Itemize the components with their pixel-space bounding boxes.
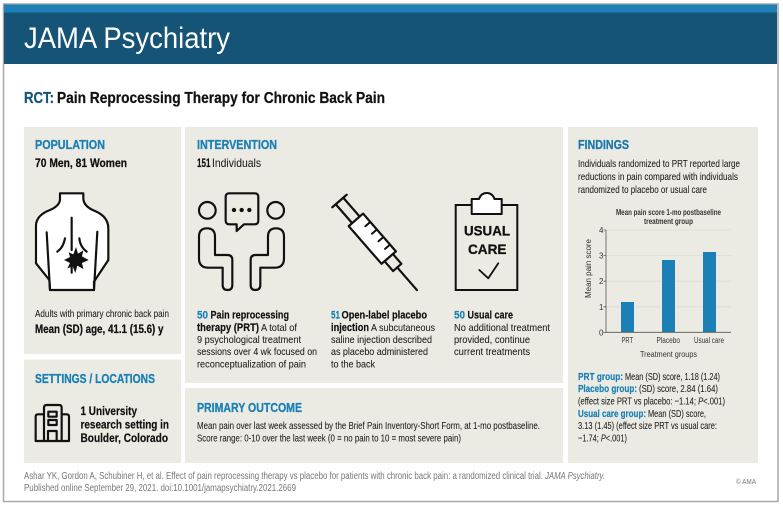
y axis tick labels: 4: [599, 226, 604, 235]
group results: (effect size PRT vs placebo: −1.14; P<.001): [578, 396, 725, 408]
text: usual care arm: current treatments: [454, 346, 530, 358]
x axis category labels: Placebo: [656, 336, 680, 345]
group results: [578, 371, 725, 444]
x axis category labels: Usual care: [694, 336, 724, 345]
text: pain reprocessing therapy arm: [197, 310, 317, 370]
group results: (SD) score, 2.84 (1.64): [639, 383, 718, 395]
x axis category labels: [622, 336, 724, 345]
x axis category labels: PRT: [622, 336, 633, 345]
title: RCT:: [24, 90, 54, 107]
setting description: [80, 404, 169, 445]
text: pain reprocessing therapy arm: reconceptualization of pain: [197, 358, 306, 370]
citation: Ashar YK, Gordon A, Schubiner H, et al. Effect of pain reprocessing therapy vs placebo for patients with chronic back pain: a randomized clinical trial.: [24, 471, 543, 482]
text: placebo injection arm: to the back: [331, 358, 376, 370]
icon: therapy conversation: [199, 193, 284, 290]
participant counts: 70 Men, 81 Women: [35, 156, 127, 170]
y axis tick labels: 0: [599, 328, 604, 337]
setting description: research setting in: [80, 418, 169, 432]
text: pain reprocessing therapy arm: sessions over 4 wk focused on: [197, 346, 317, 358]
heading: findings: FINDINGS: [578, 138, 629, 152]
icon: syringe: [332, 195, 424, 296]
heading: population: POPULATION: [35, 138, 105, 152]
bar: usual care: [703, 252, 716, 332]
population description: Adults with primary chronic back pain: [35, 308, 169, 320]
header banner: [4, 4, 777, 64]
text: placebo injection arm: as placebo administered: [331, 346, 428, 358]
text: usual care arm: No additional treatment: [454, 322, 550, 334]
panel: population: [24, 127, 181, 354]
icon: usual care clipboard: [456, 193, 517, 290]
citation: [24, 471, 605, 494]
text: placebo injection arm: saline injection described: [331, 334, 432, 346]
journal name: JAMA Psychiatry: [24, 22, 230, 55]
outcome description: Mean pain over last week assessed by the Brief Pain Inventory-Short Form, at 1-mo postbaseline.: [197, 421, 540, 432]
bar: PRT: [621, 302, 634, 332]
group results: Usual care group:: [578, 408, 646, 420]
y axis tick labels: 3: [599, 252, 604, 261]
findings summary: randomized to placebo or usual care: [578, 184, 707, 196]
group results: 3.13 (1.45) (effect size PRT vs usual care:: [578, 420, 717, 432]
text: placebo injection arm: injection: [331, 322, 369, 334]
panel: primary outcome: [185, 388, 563, 463]
group results: Mean (SD) score, 1.18 (1.24): [625, 371, 720, 383]
findings summary: reductions in pain compared with individuals: [578, 171, 738, 183]
participant total: Individuals: [212, 156, 261, 170]
citation: JAMA Psychiatry.: [544, 471, 605, 482]
setting description: 1 University: [80, 404, 137, 418]
findings summary: [578, 158, 740, 196]
y axis tick labels: 2: [599, 277, 604, 286]
chart title: Mean pain score 1-mo postbaseline: [616, 208, 721, 217]
heading: intervention: INTERVENTION: [197, 138, 277, 152]
text: pain reprocessing therapy arm: A total of: [261, 322, 297, 334]
group results: Mean (SD) score,: [648, 408, 706, 420]
heading: primary outcome: PRIMARY OUTCOME: [197, 401, 302, 415]
icon: usual care clipboard: USUAL: [464, 222, 510, 238]
outcome description: [197, 421, 540, 444]
text: pain reprocessing therapy arm: therapy (PRT): [197, 322, 259, 334]
group results: −1.74; P<.001): [578, 432, 627, 444]
mean age: Mean (SD) age, 41.1 (15.6) y: [35, 322, 164, 336]
text: pain reprocessing therapy arm: 50: [197, 310, 208, 322]
panel: findings: [568, 127, 758, 463]
panel: intervention: [185, 127, 563, 383]
chart title: treatment group: [644, 217, 693, 226]
outcome description: Score range: 0-10 over the last week (0 = no pain to 10 = most severe pain): [197, 434, 461, 444]
text: pain reprocessing therapy arm: 9 psychological treatment: [197, 334, 301, 346]
x axis label: Treatment groups: [640, 349, 697, 359]
bar: placebo: [662, 260, 675, 332]
group results: Placebo group:: [578, 383, 637, 395]
bar chart: mean pain score: [583, 208, 731, 359]
text: placebo injection arm: Open-label placebo: [342, 310, 427, 322]
heading: settings: SETTINGS / LOCATIONS: [35, 372, 155, 386]
text: usual care arm: Usual care: [468, 310, 513, 322]
citation: Published online September 29, 2021. doi:10.1001/jamapsychiatry.2021.2669: [24, 483, 296, 494]
icon: building: [36, 405, 69, 441]
group results: PRT group:: [578, 371, 623, 383]
text: usual care arm: [454, 310, 550, 358]
text: placebo injection arm: A subcutaneous: [371, 322, 435, 334]
y axis tick labels: 1: [599, 303, 604, 312]
findings summary: Individuals randomized to PRT reported large: [578, 158, 740, 170]
text: pain reprocessing therapy arm: Pain reprocessing: [210, 310, 289, 322]
y axis label: Mean pain score: [583, 239, 593, 298]
participant total: [197, 156, 261, 170]
setting description: Boulder, Colorado: [80, 431, 168, 445]
title: Pain Reprocessing Therapy for Chronic Back Pain: [57, 90, 385, 107]
icon: usual care clipboard: CARE: [468, 241, 506, 257]
chart title: [616, 208, 721, 226]
text: placebo injection arm: [331, 310, 435, 370]
panel: settings and locations: [24, 360, 181, 463]
text: usual care arm: 50: [454, 310, 465, 322]
y axis tick labels: [599, 226, 604, 337]
participant total: 151: [197, 156, 211, 170]
text: usual care arm: provided, continue: [454, 334, 530, 346]
copyright: © AMA: [736, 477, 756, 486]
icon: back with pain burst: [36, 193, 108, 290]
text: placebo injection arm: 51: [331, 310, 340, 322]
